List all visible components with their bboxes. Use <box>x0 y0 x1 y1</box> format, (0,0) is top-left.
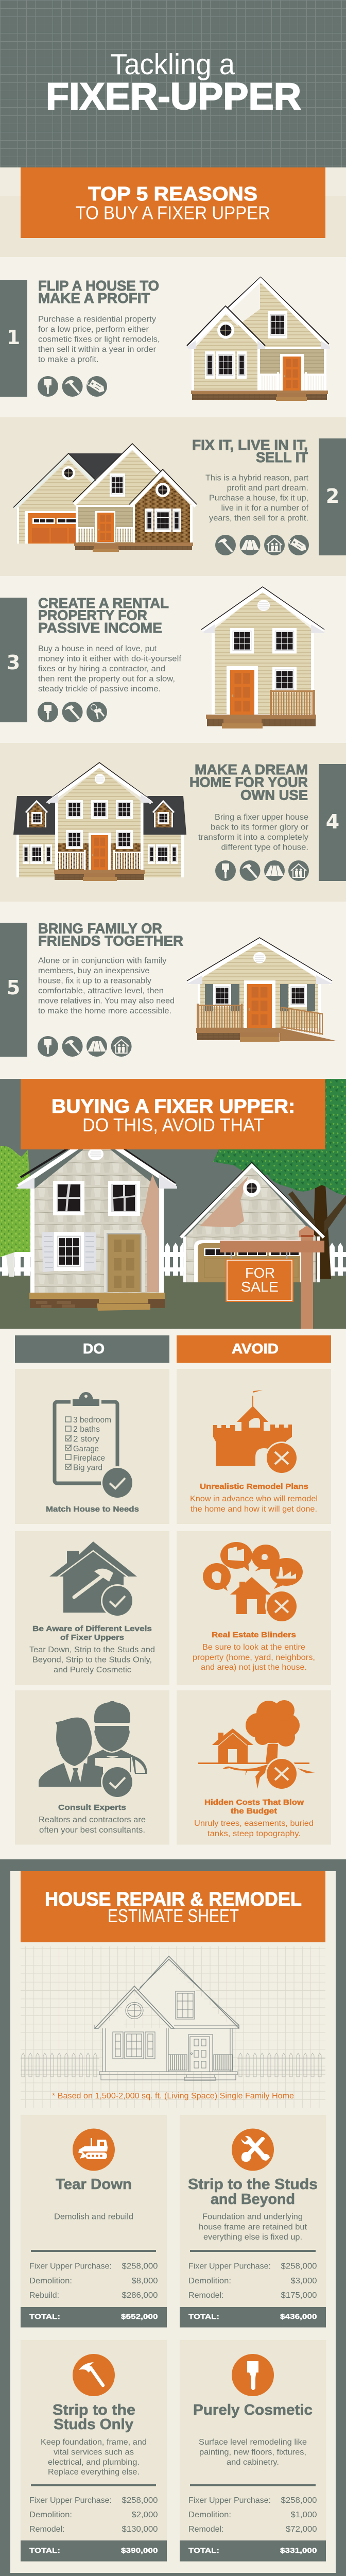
card title: and Beyond <box>211 2191 295 2208</box>
body text: Buy a house in need of love, put <box>38 645 157 653</box>
card title: Hidden Costs That Blow <box>204 1798 304 1807</box>
icon: brush <box>215 860 236 881</box>
cost table: Demolition: <box>188 2511 231 2519</box>
icon: hammer <box>62 702 83 722</box>
icon: realtor and builder <box>39 1701 147 1799</box>
card text: Keep foundation, frame, and <box>41 2438 147 2447</box>
avoid header: AVOID <box>232 1341 279 1357</box>
total bar: TOTAL: <box>29 2546 60 2554</box>
card title: Unrealistic Remodel Plans <box>200 1482 308 1491</box>
icon: hammer <box>215 535 236 555</box>
number 1: 1 <box>7 326 20 349</box>
icon: price tag <box>288 535 309 555</box>
body text: live in it for a number of <box>221 504 309 513</box>
icon: castle <box>213 1390 298 1475</box>
cost table: $258,000 <box>122 2262 158 2271</box>
number 3: 3 <box>7 651 20 674</box>
card text <box>193 1643 315 1672</box>
divider <box>190 2484 316 2486</box>
card text: the home and how it will get done. <box>191 1505 317 1514</box>
number 1 <box>0 280 27 397</box>
number 4 <box>319 764 346 881</box>
cost table: $175,000 <box>281 2291 317 2300</box>
banner: estimate sheet: HOUSE REPAIR & REMODEL <box>45 1889 302 1910</box>
heading: rental property: PROPERTY FOR <box>38 607 147 623</box>
icon: house with speech bubbles <box>203 1542 303 1623</box>
do header <box>15 1335 169 1363</box>
icon: road <box>264 860 285 881</box>
banner: estimate sheet: ESTIMATE SHEET <box>108 1905 239 1926</box>
card text: electrical, and plumbing. <box>48 2458 140 2467</box>
body text: members, buy an inexpensive <box>38 967 149 975</box>
card: real estate blinders <box>177 1531 331 1685</box>
body text: to make the home more accessible. <box>38 1007 171 1015</box>
cost table: Demolition: <box>29 2511 72 2519</box>
total bar: TOTAL: <box>188 2546 219 2554</box>
heading: family or friends: BRING FAMILY OR <box>38 921 162 937</box>
body text: This is a hybrid reason, part <box>205 473 309 482</box>
card text: Be sure to look at the entire <box>202 1643 305 1652</box>
cost table: $286,000 <box>122 2291 158 2300</box>
cost table: $130,000 <box>122 2525 158 2534</box>
card title <box>32 1624 152 1642</box>
heading: rental property: PASSIVE INCOME <box>38 620 162 636</box>
number 5: 5 <box>7 976 20 999</box>
body text: comfortable, attractive level, then <box>38 987 164 995</box>
number 2: 2 <box>326 485 339 507</box>
total bar <box>21 2540 167 2562</box>
card title: Consult Experts <box>58 1803 126 1812</box>
body text: years, then sell for a profit. <box>209 514 308 522</box>
panel: buying a fixer upper hero scene <box>0 1079 346 1329</box>
panel: reason 3 <box>0 587 324 728</box>
body text: steady trickle of passive income. <box>38 685 161 693</box>
heading: fix it: FIX IT, LIVE IN IT, <box>192 437 308 453</box>
body text: money into it either with do-it-yourself <box>38 655 182 664</box>
card text <box>199 2438 307 2467</box>
cost table: Remodel: <box>29 2525 65 2534</box>
icon: family home <box>288 860 309 881</box>
icon: road <box>86 1036 107 1057</box>
panel: reason 5 <box>0 921 338 1057</box>
body text: different type of house. <box>221 843 308 852</box>
total bar: $436,000 <box>280 2312 317 2320</box>
cost table: $258,000 <box>122 2496 158 2505</box>
body text <box>38 957 175 1015</box>
house 3 illustration <box>201 587 324 728</box>
panel: reason 1 <box>0 277 330 401</box>
card title: Tear Down <box>56 2176 132 2193</box>
card text <box>199 2212 307 2242</box>
cost table: Fixer Upper Purchase: <box>29 2262 112 2271</box>
heading: dream home: HOME FOR YOUR <box>189 774 308 790</box>
icon: brush <box>38 1036 58 1057</box>
card text <box>190 1495 318 1514</box>
card: purely cosmetic <box>180 2340 326 2562</box>
heading: rental property: CREATE A RENTAL <box>38 595 169 611</box>
card title: Be Aware of Different Levels <box>32 1624 152 1633</box>
card text: Know in advance who will remodel <box>190 1495 318 1503</box>
cost table: Fixer Upper Purchase: <box>29 2496 112 2505</box>
avoid header <box>177 1335 331 1363</box>
blueprint house <box>95 1956 239 2080</box>
panel: house repair estimate sheet <box>0 1859 346 2576</box>
card title: the Budget <box>231 1807 277 1816</box>
card text: Surface level remodeling like <box>199 2438 307 2447</box>
icon: road <box>240 535 261 555</box>
panel: reason 4 <box>13 761 346 881</box>
divider <box>31 2250 156 2252</box>
card title <box>53 2402 135 2433</box>
footnote: * Based on 1,500-2,000 sq. ft. (Living Space) Single Family Home <box>52 2092 294 2100</box>
body text: cosmetic fixes or light remodels, <box>38 335 160 344</box>
card title: Match House to Needs <box>46 1505 139 1514</box>
icon: clipboard checklist: Garage <box>73 1445 99 1453</box>
tree: left birch <box>0 1146 30 1277</box>
card title: Purely Cosmetic <box>193 2402 313 2418</box>
card text: Tear Down, Strip to the Studs and <box>29 1646 155 1654</box>
title: FIXER-UPPER <box>46 76 301 117</box>
section background: reasons <box>0 167 346 1079</box>
body text: move relatives in. You may also need <box>38 997 175 1006</box>
icon: bulldozer <box>73 2129 115 2171</box>
card text <box>41 2438 147 2477</box>
card title: Studs Only <box>54 2416 133 2433</box>
cost table: $258,000 <box>281 2262 317 2271</box>
house 5 illustration <box>187 938 338 1042</box>
card text: Demolish and rebuild <box>54 2212 133 2222</box>
for sale sign: SALE <box>241 1279 279 1295</box>
total bar: $331,000 <box>280 2546 317 2554</box>
heading: rental property <box>38 595 169 636</box>
garage <box>180 1162 324 1282</box>
cost table: Demolition: <box>188 2277 231 2285</box>
house 4 illustration <box>13 762 186 881</box>
house 1 illustration <box>187 277 330 401</box>
body text: fixes or by hiring a contractor, and <box>38 665 165 673</box>
number 2 <box>319 438 346 555</box>
panel: reason 2 <box>13 437 346 555</box>
heading: dream home <box>189 761 308 803</box>
card title: Real Estate Blinders <box>212 1631 296 1639</box>
divider <box>31 2484 156 2486</box>
title: Tackling a <box>110 48 235 81</box>
total bar: TOTAL: <box>188 2312 219 2320</box>
total bar <box>21 2307 167 2328</box>
body text <box>38 315 160 364</box>
card text: tanks, steep topography. <box>207 1829 301 1838</box>
icon: price tag <box>86 376 107 397</box>
cost table: Fixer Upper Purchase: <box>188 2496 271 2505</box>
card: levels of fixer uppers <box>15 1531 169 1685</box>
card: unrealistic remodel plans <box>177 1369 331 1524</box>
icon: clipboard checklist: 3 bedroom <box>73 1416 111 1425</box>
heading: flip a house: FLIP A HOUSE TO <box>38 278 159 294</box>
body text: transform it into a completely <box>198 833 308 842</box>
card text: Beyond, Strip to the Studs Only, <box>32 1656 152 1664</box>
icon: clipboard checklist: Big yard <box>73 1463 102 1472</box>
cost table: Remodel: <box>188 2525 224 2534</box>
icon: family home <box>111 1036 132 1057</box>
card: strip to the studs only <box>21 2340 167 2562</box>
banner: top 5 reasons: TO BUY A FIXER UPPER <box>75 202 270 224</box>
total bar: $552,000 <box>121 2312 158 2320</box>
banner: buying a fixer upper: DO THIS, AVOID THAT <box>82 1114 264 1136</box>
card text: and area) not just the house. <box>201 1663 307 1672</box>
card title: Strip to the Studs <box>188 2176 318 2193</box>
cost table: Demolition: <box>29 2277 72 2285</box>
icon: brush <box>38 702 58 722</box>
cost table: $8,000 <box>132 2277 158 2285</box>
cost table: Remodel: <box>188 2291 224 2300</box>
cost table <box>29 2262 158 2300</box>
total bar: TOTAL: <box>29 2312 60 2320</box>
card text: everything else is fixed up. <box>203 2233 302 2242</box>
body text: back to its former glory or <box>211 823 308 832</box>
do header: DO <box>83 1341 105 1357</box>
heading: dream home: MAKE A DREAM <box>195 761 308 777</box>
cost table: $1,000 <box>290 2511 317 2519</box>
total bar: $390,000 <box>121 2546 158 2554</box>
icon: brush <box>38 376 58 397</box>
card text: Foundation and underlying <box>202 2212 303 2222</box>
card: hidden costs <box>177 1690 331 1844</box>
body text <box>205 473 309 522</box>
card text: and cabinetry. <box>227 2458 279 2467</box>
cost table: Fixer Upper Purchase: <box>188 2262 271 2271</box>
icon: clipboard checklist: Fireplace <box>73 1454 105 1463</box>
number 3 <box>0 598 27 722</box>
divider <box>190 2250 316 2252</box>
banner: estimate sheet <box>21 1871 325 1942</box>
card text: house frame are retained but <box>199 2223 307 2232</box>
cost table <box>29 2496 158 2534</box>
card title: of Fixer Uppers <box>60 1633 124 1642</box>
card text: Replace everything else. <box>48 2468 140 2477</box>
banner: top 5 reasons: TOP 5 REASONS <box>88 183 257 205</box>
heading: fix it <box>192 437 308 465</box>
house 2 illustration <box>13 444 197 552</box>
icon: house with hammer <box>49 1541 137 1617</box>
card: consult experts <box>15 1690 169 1844</box>
body text <box>198 813 308 852</box>
banner: top 5 reasons <box>21 167 325 238</box>
card text <box>29 1646 155 1674</box>
card text: painting, new floors, fixtures, <box>199 2448 306 2456</box>
card text: and Purely Cosmetic <box>54 1666 131 1674</box>
card text <box>194 1819 314 1838</box>
cost table: $3,000 <box>290 2277 317 2285</box>
card text: Realtors and contractors are <box>39 1816 146 1824</box>
cost table: $258,000 <box>281 2496 317 2505</box>
card title: Strip to the <box>53 2402 135 2418</box>
icon: hammer <box>240 860 261 881</box>
card title <box>204 1798 304 1816</box>
body text: then sell it within a year in order <box>38 345 156 354</box>
cost table: $72,000 <box>286 2525 317 2534</box>
number 5 <box>0 923 27 1057</box>
card text: often your best consultants. <box>39 1826 145 1835</box>
number 4: 4 <box>326 810 339 833</box>
body text: Bring a fixer upper house <box>215 813 308 822</box>
icon: hammer <box>62 1036 83 1057</box>
header band with grid <box>0 0 346 167</box>
icon: hammer <box>62 376 83 397</box>
icon: hammer <box>73 2354 115 2396</box>
icon: keys <box>86 702 107 722</box>
card: match house to needs <box>15 1369 169 1524</box>
icon: paint brush <box>232 2354 274 2396</box>
cost table <box>188 2262 317 2300</box>
body text: Purchase a house, fix it up, <box>209 494 308 502</box>
banner: buying a fixer upper: BUYING A FIXER UPPER: <box>51 1096 295 1117</box>
total bar <box>180 2540 326 2562</box>
card title <box>188 2176 318 2208</box>
cost table <box>188 2496 317 2534</box>
card text: property (home, yard, neighbors, <box>193 1653 315 1662</box>
for sale sign <box>220 1226 324 1329</box>
cost table: $2,000 <box>132 2511 158 2519</box>
body text: Purchase a residential property <box>38 315 156 324</box>
body text: then rent the property out for a slow, <box>38 675 175 684</box>
total bar <box>180 2307 326 2328</box>
fence <box>0 1243 346 1276</box>
icon: tree and house roots <box>198 1700 315 1790</box>
body text: to make a profit. <box>38 355 99 364</box>
body text: profit and part dream. <box>227 484 308 493</box>
blueprint grid <box>21 1946 325 2108</box>
tree: right oak <box>213 1079 346 1279</box>
icon: clipboard checklist: 2 baths <box>73 1425 100 1434</box>
panel: do and avoid <box>0 1329 346 1859</box>
title <box>46 48 301 117</box>
heading: flip a house <box>38 278 159 306</box>
card: tear down <box>21 2115 167 2328</box>
icon: family home <box>264 535 285 555</box>
for sale sign: FOR <box>245 1265 275 1281</box>
icon: clipboard checklist <box>55 1392 134 1499</box>
banner: buying a fixer upper <box>21 1079 325 1149</box>
heading: flip a house: MAKE A PROFIT <box>38 290 150 306</box>
body text: Alone or in conjunction with family <box>38 957 167 965</box>
fixer house <box>16 1131 177 1311</box>
body text <box>38 645 182 693</box>
heading: fix it: SELL IT <box>256 449 308 465</box>
card text <box>39 1816 146 1835</box>
heading: family or friends: FRIENDS TOGETHER <box>38 933 183 949</box>
blueprint fence <box>21 2053 325 2077</box>
icon: wrench and screwdriver <box>232 2129 274 2171</box>
card text: vital services such as <box>54 2448 134 2456</box>
card text: Unruly trees, easements, buried <box>194 1819 314 1828</box>
body text: house, fix it up to a reasonably <box>38 977 151 986</box>
icon: clipboard checklist: 2 story <box>73 1435 99 1444</box>
heading: family or friends <box>38 921 183 949</box>
cost table: Rebuild: <box>29 2291 59 2300</box>
card: strip to the studs and beyond <box>180 2115 326 2328</box>
body text: for a low price, perform either <box>38 325 149 334</box>
heading: dream home: OWN USE <box>240 787 308 803</box>
